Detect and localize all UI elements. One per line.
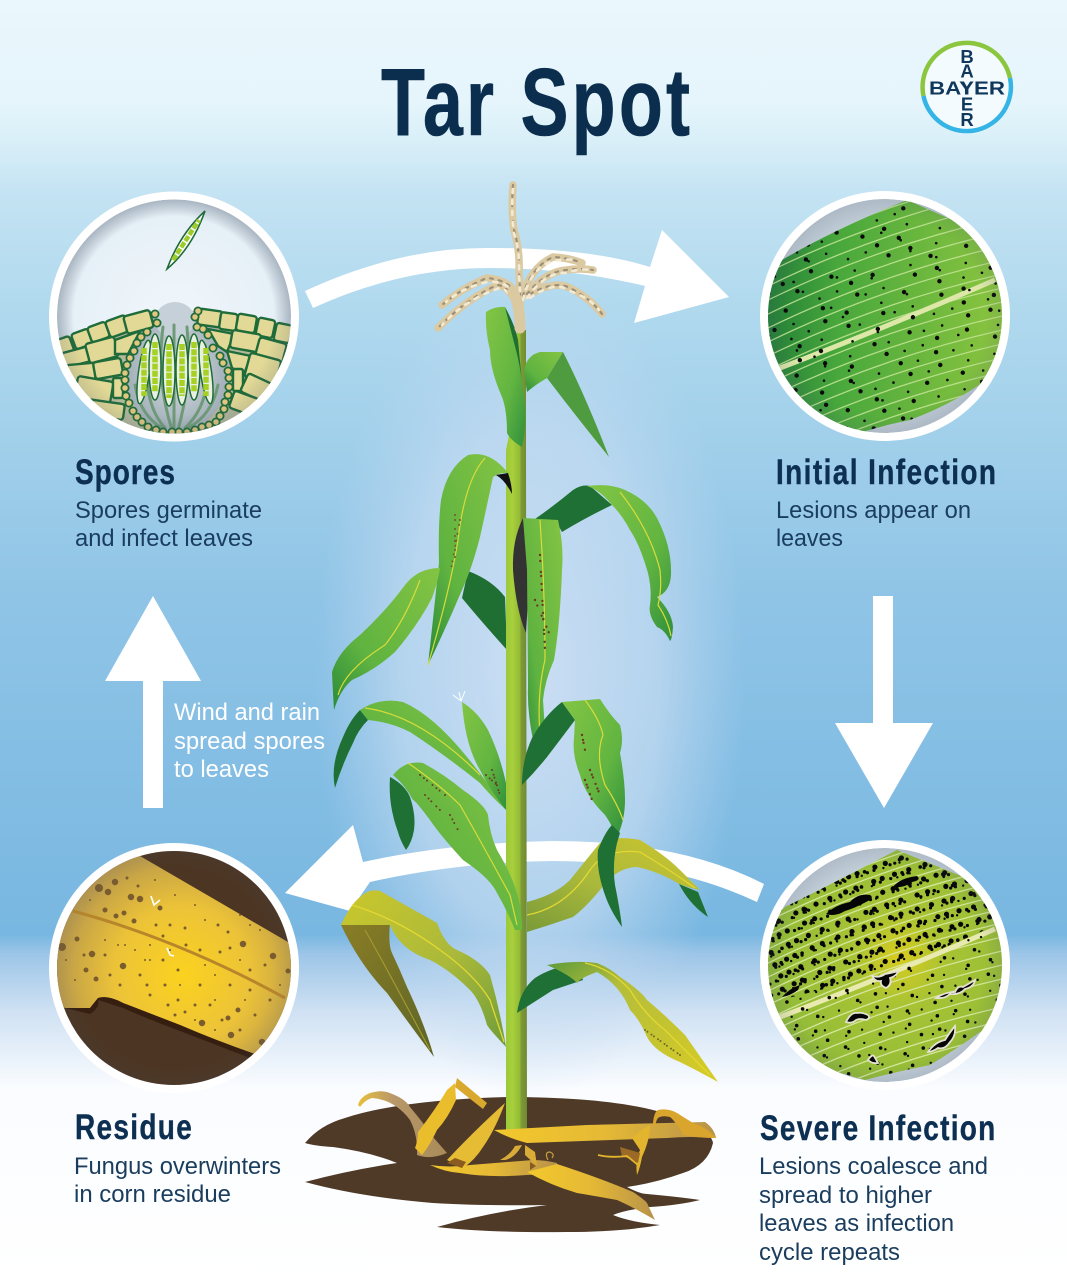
residue illustration bbox=[57, 851, 291, 1085]
leaf: front stalk long hanging bbox=[513, 518, 562, 758]
text: residue description bbox=[74, 1153, 281, 1208]
heading: severe infection: Severe Infection bbox=[760, 1108, 995, 1148]
heading: spores: Spores bbox=[75, 452, 175, 492]
spore in air bbox=[167, 211, 205, 269]
leaf illustration with lesions bbox=[768, 199, 1002, 433]
text: initial infection description bbox=[776, 497, 971, 552]
corn residue on soil bbox=[358, 1078, 716, 1220]
residue: curl top right bbox=[653, 1109, 716, 1138]
text: wind and rain label bbox=[174, 699, 325, 783]
circle frame bbox=[49, 843, 299, 1093]
text: initial infection description: Lesions appear on bbox=[776, 497, 971, 524]
leaf: small upright with tuft bbox=[453, 691, 506, 810]
corn tassel bbox=[438, 185, 602, 328]
text: severe infection description: Lesions coalesce and bbox=[759, 1153, 988, 1180]
text: severe infection description: spread to higher bbox=[759, 1182, 932, 1209]
text: spores description: and infect leaves bbox=[75, 525, 253, 552]
text: wind and rain label: spread spores bbox=[174, 728, 325, 755]
leaf: top right bbox=[524, 352, 609, 457]
circle frame bbox=[760, 191, 1010, 441]
text: wind and rain label: to leaves bbox=[174, 756, 269, 783]
arrow: severe infection to residue bbox=[285, 825, 764, 911]
arrow: residue to spores bbox=[105, 596, 201, 808]
residue: lower horizontal bbox=[430, 1160, 557, 1176]
residue: diagonal roll bbox=[447, 1103, 505, 1168]
leaf: lower left fold bbox=[341, 923, 434, 1057]
text: wind and rain label: Wind and rain bbox=[174, 699, 320, 726]
leaf: top left bbox=[486, 307, 525, 447]
residue: broken stalk horizontal bbox=[494, 1122, 716, 1143]
corn plant bbox=[332, 307, 718, 1130]
panel: severe infection bbox=[760, 840, 1010, 1082]
panel: initial infection bbox=[760, 191, 1010, 441]
leaf: left drooping bbox=[332, 568, 440, 710]
text: residue description: in corn residue bbox=[74, 1181, 231, 1208]
heading: residue: Residue bbox=[75, 1107, 192, 1147]
text: severe infection description bbox=[759, 1153, 988, 1266]
residue: upright rolled blade bbox=[415, 1083, 456, 1155]
soil patch bbox=[305, 1097, 713, 1232]
heading: initial infection: Initial Infection bbox=[776, 452, 996, 492]
leaf illustration with coalesced lesions bbox=[768, 848, 1002, 1082]
text: spores description: Spores germinate bbox=[75, 497, 262, 524]
text: spores description bbox=[75, 497, 262, 552]
residue: long lying blade bbox=[527, 1164, 655, 1220]
arrow: initial to severe infection bbox=[835, 596, 933, 808]
central glow behind plant bbox=[315, 260, 745, 1100]
residue: small curl near stalk bbox=[500, 1145, 537, 1166]
logo: Bayer cross: BAYER bbox=[929, 78, 1005, 98]
residue: spiral curl bbox=[546, 1152, 553, 1160]
spore illustration bbox=[50, 200, 295, 440]
leaf: lower left yellowing bbox=[341, 890, 506, 1050]
residue: hanging strip bbox=[598, 1125, 650, 1175]
text: severe infection description: cycle repeats bbox=[759, 1239, 900, 1266]
logo: Bayer cross: BAYER bbox=[960, 46, 974, 130]
logo: Bayer cross bbox=[921, 42, 1013, 134]
leaf: upper right arching bbox=[535, 485, 673, 641]
title: Tar Spot bbox=[381, 48, 690, 155]
residue: rolled stem detail bbox=[447, 1158, 536, 1170]
leaf: far back dark left bbox=[462, 571, 507, 650]
stalk bbox=[506, 330, 527, 1130]
circle frame bbox=[49, 192, 299, 442]
leaf: lower right yellowing bbox=[527, 838, 708, 932]
text: severe infection description: leaves as infection bbox=[759, 1210, 954, 1237]
residue: curled leaf left bbox=[358, 1091, 447, 1157]
leaf: centre front large bbox=[390, 762, 522, 930]
leaf: mid left arching bbox=[334, 701, 506, 810]
panel: residue bbox=[49, 843, 300, 1095]
text: residue description: Fungus overwinters bbox=[74, 1153, 281, 1180]
leaf: bottom right bbox=[517, 962, 718, 1082]
leaf: right wavy green bbox=[562, 699, 625, 927]
leaf: right dark behind bbox=[522, 702, 575, 785]
leaf: upper left with black tip bbox=[428, 454, 512, 665]
text: initial infection description: leaves bbox=[776, 525, 843, 552]
circle frame bbox=[760, 840, 1010, 1090]
arrow: spores to initial infection bbox=[305, 230, 729, 323]
panel: spores bbox=[49, 192, 299, 442]
residue: small broken piece bbox=[455, 1078, 487, 1109]
